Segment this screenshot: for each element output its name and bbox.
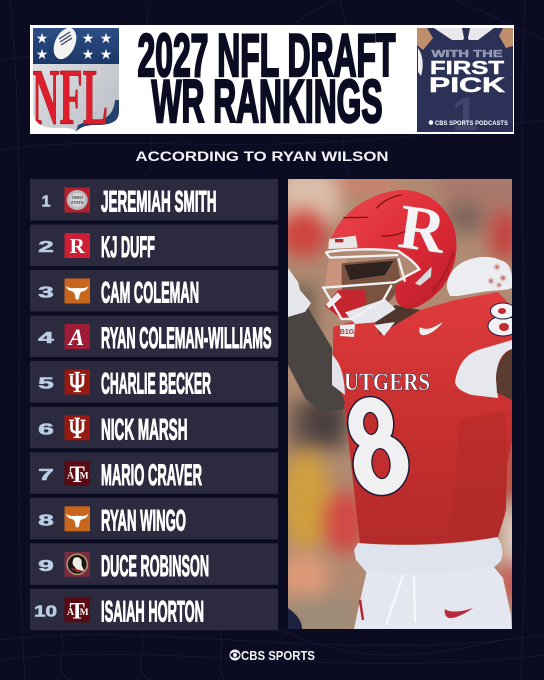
row 4: Ryan Coleman-Williams	[30, 316, 278, 357]
face mask	[323, 249, 419, 319]
icon: Florida State	[64, 552, 90, 577]
face	[342, 258, 402, 308]
icon: NFL shield logo: ★	[100, 30, 112, 46]
row 5: Charlie Becker	[30, 361, 278, 402]
icon: Alabama	[64, 324, 90, 350]
row 3: Cam Coleman	[30, 270, 278, 312]
row 1: Jeremiah Smith: 1	[42, 194, 51, 210]
subtitle: ACCORDING TO RYAN WILSON	[136, 149, 388, 164]
row 6: Nick Marsh: NICK MARSH	[101, 413, 188, 446]
row 9: Duce Robinson: DUCE ROBINSON	[101, 550, 209, 583]
icon: NFL shield logo: ★	[36, 46, 48, 62]
jersey shading	[456, 410, 506, 536]
podcast cover: With the First Pick: PICK	[429, 74, 505, 97]
row 2: KJ Duff: KJ DUFF	[101, 231, 155, 264]
row 6: Nick Marsh	[30, 407, 278, 448]
jersey lettering: UTGERS	[344, 369, 430, 396]
icon: Indiana	[64, 370, 90, 394]
row 8: Ryan Wingo	[30, 498, 278, 539]
podcast cover: With the First Pick: 1	[452, 88, 478, 140]
icon: Texas A&M	[64, 461, 90, 487]
player photo	[288, 179, 512, 629]
row 7: Mario Craver: MARIO CRAVER	[101, 459, 202, 492]
podcast cover: With the First Pick: FIRST	[430, 57, 505, 78]
icon: Ohio State	[64, 188, 90, 212]
podcast cover: With the First Pick: CBS SPORTS PODCASTS	[435, 121, 508, 127]
left arm	[288, 308, 345, 411]
row 2: KJ Duff	[30, 225, 278, 266]
icon: Indiana	[64, 415, 90, 440]
row 1: Jeremiah Smith	[30, 179, 278, 220]
blurred stadium crowd	[288, 179, 512, 629]
visor	[325, 258, 347, 287]
helmet R logo: R	[395, 191, 451, 267]
jersey number 8	[345, 393, 412, 498]
row 10: Isaiah Horton: ISAIAH HORTON	[101, 595, 204, 628]
text: RYAN COLEMAN-WILLIAMS	[101, 322, 272, 355]
neck	[375, 305, 420, 335]
row 8: Ryan Wingo: 8	[38, 512, 54, 529]
row 3: Cam Coleman: 3	[38, 284, 54, 302]
chest logos	[340, 322, 443, 337]
mouth guard	[324, 290, 367, 319]
vent	[415, 267, 432, 286]
icon: NFL shield logo: ★	[36, 30, 48, 46]
icon: NFL shield logo: ★	[82, 30, 94, 46]
chest logos: B1G	[340, 329, 355, 336]
icon: Ohio State: STATE	[71, 200, 84, 205]
podcast cover: With the First Pick	[417, 28, 513, 140]
podcast cover: With the First Pick: WITH THE	[432, 49, 503, 60]
icon: Alabama: A	[67, 325, 84, 350]
title	[138, 22, 396, 135]
row 1: Jeremiah Smith: JEREMIAH SMITH	[101, 186, 216, 218]
wristband and glove	[288, 268, 311, 317]
row 9: Duce Robinson	[30, 543, 278, 585]
icon: NFL shield logo: ★	[82, 46, 94, 62]
chin strap	[345, 299, 396, 324]
row 9: Duce Robinson: 9	[38, 558, 54, 575]
bumper	[328, 236, 358, 249]
shoulder number	[488, 302, 512, 336]
row 4: Ryan Coleman-Williams: 4	[38, 330, 54, 347]
row 5: Charlie Becker: 5	[38, 376, 54, 392]
rankings list	[30, 179, 278, 630]
row 7: Mario Craver	[30, 452, 278, 494]
glove	[447, 257, 512, 296]
icon: NFL shield logo: ★	[100, 46, 112, 62]
row 5: Charlie Becker: CHARLIE BECKER	[101, 368, 211, 400]
header banner	[30, 22, 514, 142]
icon: Ohio State: OHIO	[71, 195, 83, 200]
icon: Rutgers: R	[70, 234, 86, 258]
row 10: Isaiah Horton	[30, 589, 278, 630]
right sleeve and arm	[455, 340, 512, 398]
row 2: KJ Duff: 2	[38, 239, 54, 256]
icon: Texas	[64, 506, 90, 531]
row 10: Isaiah Horton: 10	[34, 603, 57, 620]
icon: Rutgers	[64, 233, 90, 258]
icon: Texas	[64, 278, 90, 304]
row 3: Cam Coleman: CAM COLEMAN	[101, 276, 199, 310]
helmet and head	[323, 190, 456, 324]
CBS Sports footer logo: CBS SPORTS	[241, 648, 315, 663]
pants	[354, 566, 512, 629]
icon: NFL shield logo: NFL	[32, 54, 108, 142]
row 6: Nick Marsh: 6	[38, 421, 54, 438]
row 7: Mario Craver: 7	[38, 467, 54, 484]
jersey	[333, 292, 512, 545]
row 8: Ryan Wingo: RYAN WINGO	[101, 504, 186, 537]
undershirt	[354, 537, 502, 575]
shell	[328, 190, 456, 308]
icon: Texas A&M	[64, 597, 90, 623]
icon: NFL shield logo	[33, 28, 119, 132]
